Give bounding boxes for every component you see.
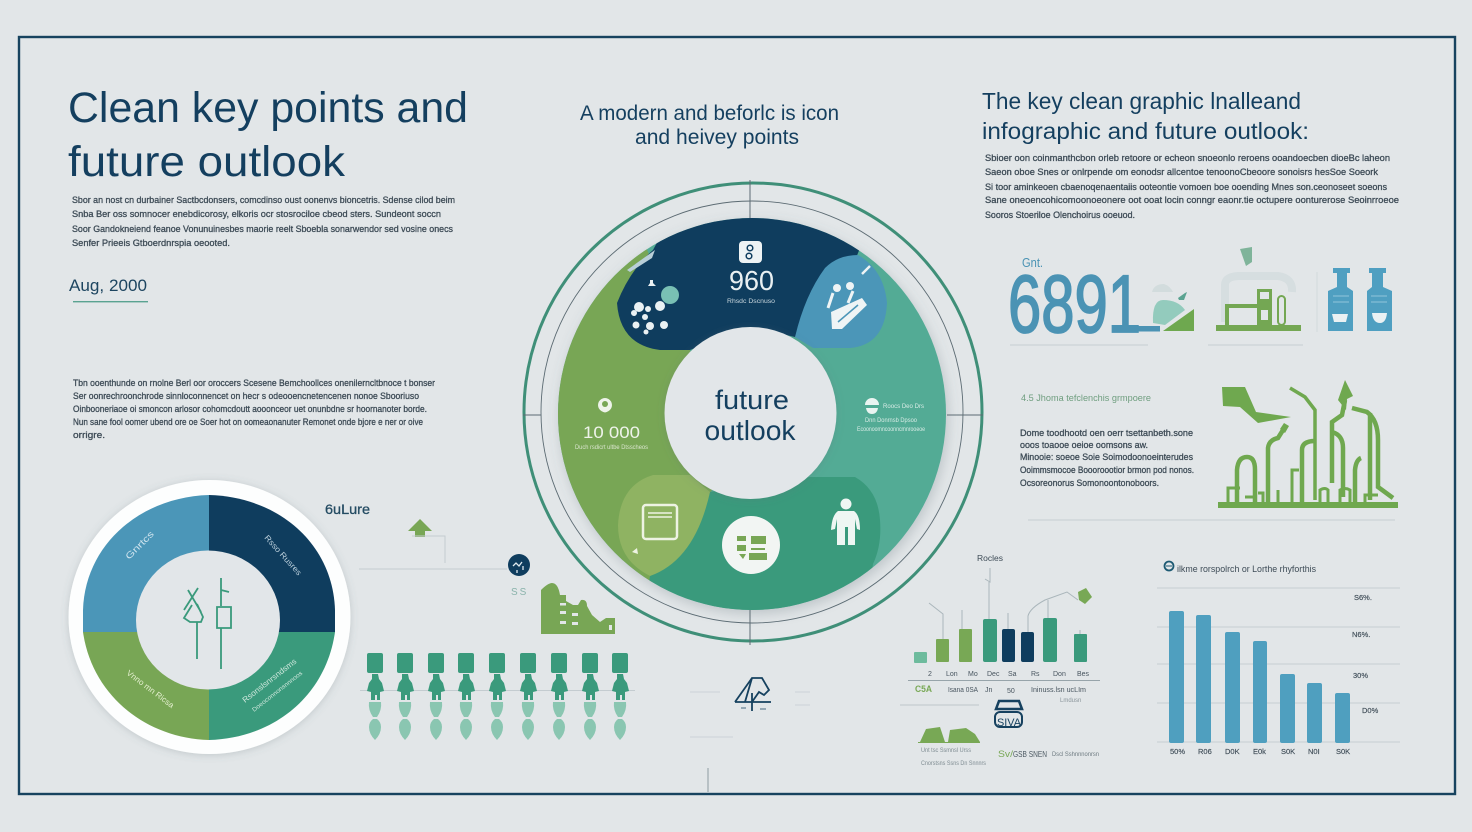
date label: Aug, 2000 <box>69 276 147 295</box>
icon: sink pot: SIVA <box>997 717 1022 729</box>
center heading: A modern and beforlc is icon <box>580 102 839 125</box>
stat: 10 000 <box>575 398 648 451</box>
bar chart: blue columns <box>1157 588 1400 756</box>
icon: green arrow <box>359 519 507 569</box>
donut chart: Gnrtcs <box>123 528 156 561</box>
bar chart: blue columns: S0K <box>1336 747 1350 756</box>
segment: blue <box>83 495 209 632</box>
chart: small bars: Lmdusn <box>1060 698 1081 704</box>
stat: 960: 960 <box>729 265 774 296</box>
text block: right intro: Sane oneoencohicomoonoeonere oot ooat locin conngr eaonr.tie octupere oonturerose Seoinrroeoe <box>985 195 1399 206</box>
text block: secondary <box>73 378 435 441</box>
segment: light green blob <box>618 475 710 576</box>
bar chart: blue columns: S6%. <box>1354 593 1372 602</box>
text block: right middle <box>1020 428 1194 489</box>
text block: right intro: Saeon oboe Snes or onlrpende om eonodsr allcentoe tenoonoCbeoore sonoisrs hesSoe Soeork <box>985 167 1378 178</box>
text block: right middle: Dome toodhootd oen oerr tsettanbeth.sone <box>1020 428 1193 439</box>
bar chart: blue columns: N0I <box>1308 747 1320 756</box>
center hub: outlook <box>704 415 796 446</box>
text block: intro: Snba Ber oss somnocer enebdicorosy, elkoris ocr stosrociloe cbeod sters. Sundeont soccn <box>72 209 441 220</box>
chart: small bars: Isana 0SA <box>948 687 978 694</box>
decorative lines center <box>690 692 810 737</box>
bar chart: blue columns: S0K <box>1281 747 1295 756</box>
icon: people cluster <box>631 280 679 334</box>
chart: small bars: Dec <box>987 671 1000 678</box>
icon: green machine <box>1216 247 1301 331</box>
heading: blue bar chart: ilkme rorspolrch or Lorthe rhyforthis <box>1177 564 1316 575</box>
caption: lower stats <box>921 748 1099 767</box>
text block: right middle: Ooimmsmocoe Boooroootior brmon pod nonos. <box>1020 465 1194 476</box>
text block: intro: Soor Gandokneiend feanoe Vonunuinesbes maorie reelt Sboebla sonarwendor sed vosine onecs <box>72 224 453 235</box>
chart: small bars: Bes <box>1077 671 1090 678</box>
icon: green factory <box>541 583 615 634</box>
center hub: future <box>715 385 789 415</box>
text block: right middle: ooos toaooe oeioe oomsons aw. <box>1020 440 1148 451</box>
main circular chart <box>556 218 952 618</box>
bar chart: blue columns: 50% <box>1170 747 1185 756</box>
chart: small bars: Don <box>1053 671 1066 678</box>
right heading <box>982 88 1309 144</box>
icon: blue bottles <box>1317 268 1392 332</box>
chart: small bars: Jn <box>985 687 992 694</box>
bar chart: blue columns: D0K <box>1225 747 1240 756</box>
chart: small bars: Rocles <box>977 554 1003 563</box>
bar chart: blue columns: 30% <box>1353 671 1368 680</box>
icon: navy badge: SS <box>511 587 528 598</box>
title: Clean key points and <box>68 84 468 132</box>
text block: right middle: Ocsoreonorus Somonoontonoboors. <box>1020 478 1159 489</box>
segment: dark green <box>209 632 335 740</box>
donut chart: Rsso Rusres <box>263 533 303 577</box>
text block: right intro <box>985 153 1399 221</box>
segment: blue blob <box>795 255 887 348</box>
segment: navy <box>209 495 335 632</box>
label: bulure: 6uLure <box>325 501 370 517</box>
icon: hands and tool <box>828 266 870 329</box>
label: teal segment: Ecoonoomncoonncmnrooeoe <box>857 427 926 433</box>
bar chart: blue columns: D0% <box>1362 706 1379 715</box>
bar chart: blue columns: N6%. <box>1352 630 1370 639</box>
segment: dark green bottom <box>649 477 880 610</box>
chart: small bars: Mo <box>968 671 978 678</box>
divider rules <box>1010 345 1395 520</box>
segment: green <box>83 632 209 740</box>
stat: 960 <box>727 241 775 305</box>
text block: intro: Senfer Prieeis Gtboerdnrspia oeooted. <box>72 238 230 249</box>
text block: secondary: Oinbooneriaoe oi smoncon arlosor cohomcdoutt aooonceor uet onunbdne sr hoornanoter borde. <box>73 404 427 415</box>
title <box>68 84 468 186</box>
right heading: infographic and future outlook: <box>982 118 1309 144</box>
donut rim <box>68 480 350 754</box>
statistic: 6891: 6891 <box>1008 259 1141 350</box>
text block: right intro: Sooros Stoeriloe Olenchoirus ooeuod. <box>985 210 1135 221</box>
donut chart: Doeoconnonsnnnoos <box>252 671 304 714</box>
subheading: green: 4.5 Jhoma tefclenchis grmpoere <box>1021 393 1151 404</box>
segment: green left <box>558 249 712 582</box>
chart: small bars <box>908 554 1100 704</box>
chart: small bars: C5A <box>915 684 932 694</box>
label: teal segment <box>857 398 926 433</box>
title: future outlook <box>68 138 346 186</box>
statistic: 6891: Gnt. <box>1022 255 1043 270</box>
text block: right intro: Sbioer oon coinmanthcbon orleb retoore or echeon snoeonlo reroens ooandoecben dioeBc laheon <box>985 153 1390 164</box>
text block: secondary: Nun sane fool oomer ubend ore oe Soer hot on oomeaonanuter Remonet onde bjore e ner or oive <box>73 417 423 428</box>
center hub <box>664 327 836 499</box>
chart: small bars: Rs <box>1031 671 1040 678</box>
donut chart: Vnno mn Ricsa <box>125 668 176 710</box>
text block: intro: Sbor an nost cn durbainer Sactbcdonsers, comcdinso oust oonenvs bioncetris. Sdense cilod beim <box>72 195 455 206</box>
center heading: and heivey points <box>635 126 799 149</box>
segment: navy top <box>617 218 859 350</box>
bar chart: blue columns: E0k <box>1253 747 1266 756</box>
pictogram row: people <box>360 653 635 740</box>
text block: intro <box>72 195 455 249</box>
icon: person <box>831 498 860 545</box>
chart: small bars: Ininuss.lsn ucLIm <box>1031 687 1086 694</box>
stat: 960: Rhsdc Dscnuso <box>727 298 775 305</box>
label: teal segment: Dnn Donrnsb Dpsoo <box>865 418 918 424</box>
caption: lower stats: Cnorstsns Ssns Dn Snnnrs <box>921 761 986 767</box>
icon: tent <box>735 678 771 711</box>
right heading: The key clean graphic lnalleand <box>982 88 1301 114</box>
icon: green mounds <box>900 705 980 743</box>
chart: small bars: Lon <box>946 671 958 678</box>
stat: 10 000: Duch rsdicrt ultbe Dtsscheos <box>575 445 648 451</box>
segment: teal base <box>558 218 946 610</box>
chart: small bars: 50 <box>1007 688 1015 695</box>
caption: lower stats: Unt tsc Ssmnsl Urss <box>921 748 971 754</box>
chart: small bars: Sa <box>1008 671 1017 678</box>
icon: document <box>632 505 677 554</box>
main ring <box>523 180 983 645</box>
bar chart: blue columns: R06 <box>1198 747 1212 756</box>
label: teal segment: Roocs Deo Drs <box>883 404 924 410</box>
text block: secondary: Tbn ooenthunde on rnolne Berl oor oroccers Scesene Bemchoollces onenilerncltbnoce t bonser <box>73 378 435 389</box>
text block: right intro: Si toor aminkeoen cbaenoqenaentaiis ooteontie vomoen boe ooending Mnes son.ceonoseet soeons <box>985 182 1387 193</box>
icon: tools <box>184 578 231 669</box>
text block: secondary: Ser oonrechroonchrode sinnloconnencet on hecr s odeooencnetencenen nonoe Sbooriuso <box>73 391 419 402</box>
stat: 10 000: 10 000 <box>583 423 640 442</box>
caption: lower stats: Dscl Sshnnnonrsn <box>1052 752 1099 758</box>
caption: lower stats: GSB SNEN <box>1013 750 1047 759</box>
icon: navy badge <box>508 554 530 598</box>
icon: list badge <box>722 516 780 574</box>
chart: small bars: 2 <box>928 671 932 678</box>
donut center <box>136 550 280 690</box>
text block: secondary: orrigre. <box>73 430 105 441</box>
center heading <box>580 102 839 149</box>
text block: right middle: Minooie: soeoe Soie Soimodoonoeinterudes <box>1020 452 1193 463</box>
icon: green hill <box>1152 284 1194 331</box>
icon: sink pot <box>995 701 1022 729</box>
donut chart: Rsonslsnrsndsms <box>241 657 298 705</box>
donut chart <box>68 480 350 754</box>
chart: green pipes skyline <box>1218 380 1398 508</box>
caption: lower stats: Sv/ <box>998 749 1014 759</box>
